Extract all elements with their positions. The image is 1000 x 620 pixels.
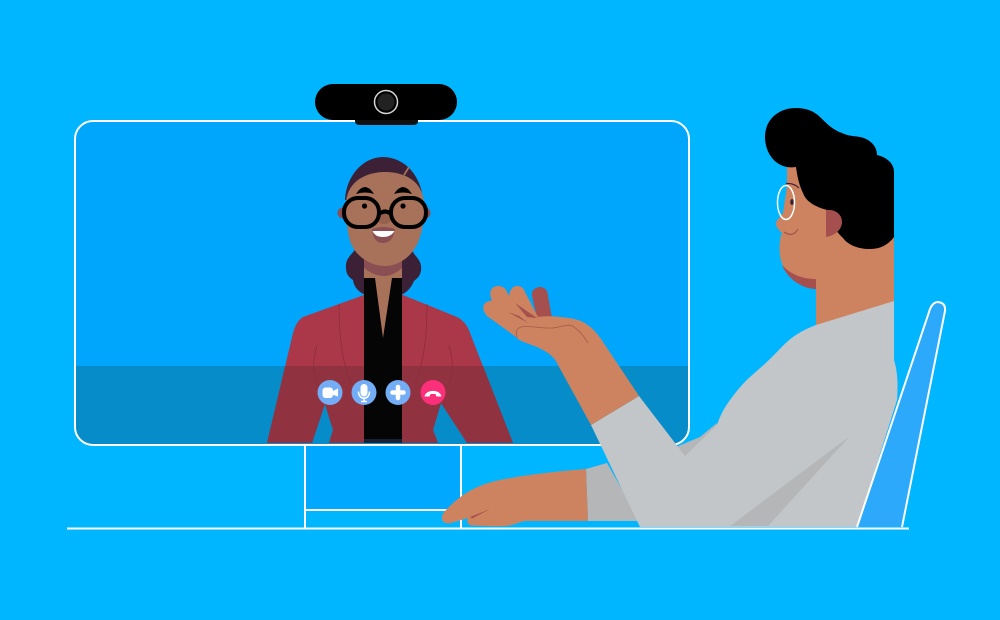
nose	[376, 212, 392, 224]
call controls	[318, 380, 446, 405]
eyebrow	[786, 183, 799, 188]
button: microphone	[352, 380, 376, 405]
monitor frame	[75, 121, 689, 445]
button: camera	[318, 380, 342, 405]
neck and face	[776, 160, 894, 328]
hair	[765, 108, 894, 249]
shoulder shadow	[676, 423, 717, 457]
button: end call	[420, 380, 446, 405]
webcam	[315, 84, 457, 125]
glasses	[344, 198, 426, 227]
neck shadow	[364, 255, 402, 276]
jacket lower tint	[267, 366, 513, 443]
lower sleeve	[586, 463, 640, 521]
glasses	[778, 186, 794, 220]
jacket upper	[267, 295, 513, 443]
button: add	[386, 380, 410, 405]
shirt hem	[364, 439, 402, 443]
monitor stand	[305, 445, 461, 528]
eyes	[362, 203, 367, 209]
shirt neckline	[375, 278, 392, 338]
jacket lapel lines	[314, 304, 452, 388]
ears	[338, 208, 348, 218]
neck	[364, 250, 402, 296]
hair parting	[404, 167, 409, 175]
chin shadow	[782, 265, 816, 289]
dark finger	[532, 287, 552, 318]
smile	[784, 229, 798, 234]
chair	[857, 302, 945, 527]
hair top	[345, 157, 423, 200]
black shirt	[364, 278, 402, 443]
sweater crease	[730, 436, 850, 526]
mouth	[372, 227, 395, 243]
eyebrows	[356, 187, 412, 194]
raised hand and forearm	[483, 286, 639, 425]
man	[442, 108, 898, 527]
desk line	[67, 528, 909, 530]
monitor screen	[75, 121, 689, 445]
teeth	[372, 231, 394, 237]
palm line	[516, 325, 588, 343]
hair buns	[346, 248, 421, 295]
lower arm and hand	[442, 469, 588, 526]
finger crease	[470, 509, 490, 518]
face	[346, 172, 424, 266]
woman on screen	[267, 157, 513, 443]
sweater body and raised arm sleeve	[591, 301, 898, 527]
finger creases	[508, 303, 537, 323]
eye	[790, 199, 794, 205]
ear	[826, 210, 842, 237]
